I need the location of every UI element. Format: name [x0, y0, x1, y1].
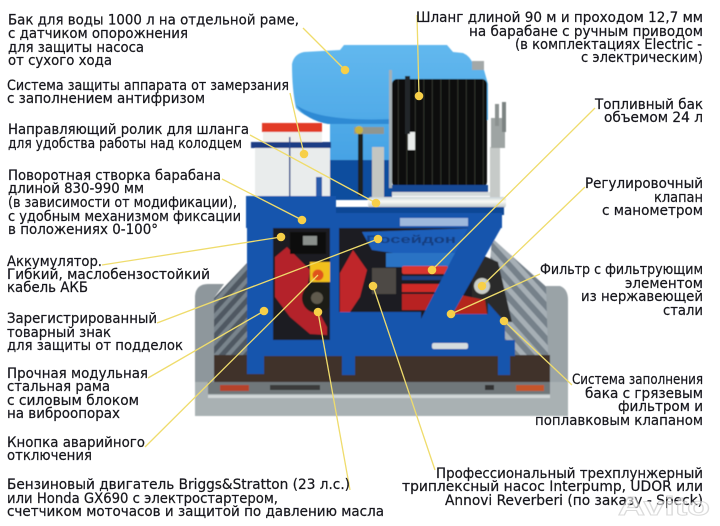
label: filter: стали — [663, 303, 703, 319]
label: water tank — [8, 12, 299, 69]
label: filling system: поплавковым клапаном — [535, 413, 703, 429]
label: regulating valve: клапан — [654, 190, 703, 206]
label: guide roller — [8, 122, 249, 152]
label: hose: с электрическим) — [581, 50, 703, 66]
label: filter: из нержавеющей — [581, 289, 703, 305]
label: trademark: товарный знак — [7, 325, 111, 341]
label: antifreeze system: Система защиты аппарата от замерзания — [7, 78, 289, 94]
label: hose: Шланг длиной 90 м и проходом 12,7 мм — [416, 10, 703, 26]
label: drum door: (в зависимости от модификации), — [8, 195, 237, 211]
label: steel frame: на виброопорах — [7, 406, 120, 422]
label: filling system: фильтром и — [618, 399, 703, 415]
label: trademark: для защиты от подделок — [7, 338, 183, 354]
frame label plates — [400, 218, 468, 226]
engine covers — [275, 232, 367, 335]
label: regulating valve — [585, 176, 703, 219]
label: filter — [540, 262, 703, 319]
label: guide roller: Направляющий ролик для шланга — [8, 122, 249, 138]
frame latch — [432, 343, 468, 349]
leader lines — [102, 15, 595, 490]
label: hose: на барабане с ручным приводом — [469, 24, 703, 40]
label: fuel tank: объемом 24 л — [604, 110, 703, 126]
label: fuel tank — [594, 97, 703, 126]
label: fuel tank: Топливный бак — [594, 97, 703, 113]
label: regulating valve: с манометром — [602, 203, 703, 219]
blue frame — [246, 213, 515, 375]
cap — [472, 61, 484, 70]
label: drum door — [8, 168, 241, 238]
inner dark bay — [272, 228, 472, 342]
left labels — [7, 12, 384, 520]
water tank — [292, 45, 488, 165]
label: battery: Гибкий, маслобензостойкий — [7, 267, 210, 283]
label: pump: триплексный насос Interpump, UDOR или — [402, 479, 703, 495]
label: engine — [7, 477, 384, 520]
label: drum door: с удобным механизмом фиксации — [8, 209, 241, 225]
label: pump: Annovi Reverberi (по заказу - Speck) — [445, 493, 703, 509]
valve and reel supports — [354, 102, 506, 197]
label: filter: элементом — [625, 276, 703, 292]
label: drum door: длиной 830-990 мм — [8, 181, 144, 197]
label: steel frame: с силовым блоком — [7, 393, 139, 409]
pump red parts — [372, 266, 490, 314]
blue cylinder — [386, 253, 462, 267]
label: battery: кабель АКБ — [7, 280, 88, 296]
label: steel frame: Прочная модульная — [7, 366, 148, 382]
watermark: Avito — [618, 491, 710, 521]
label: filling system — [535, 372, 703, 429]
right labels — [402, 10, 703, 509]
under-roller beam — [336, 207, 504, 215]
pulley hub — [311, 292, 323, 304]
label: pump: Профессиональный трехплунжерный — [436, 466, 703, 482]
label: antifreeze system: с заполнением антифризом — [7, 91, 205, 107]
blue panel under reel — [330, 160, 392, 200]
illustration: jetting machine on trailer — [195, 45, 568, 416]
label: trademark — [7, 311, 183, 354]
label: battery: Аккумулятор. — [7, 254, 102, 270]
label: water tank: для защиты насоса — [8, 40, 144, 56]
label: hose: (в комплектациях Electric - — [515, 37, 702, 53]
label: guide roller: для удобства работы над колодцем — [8, 136, 242, 152]
label: regulating valve: Регулировочный — [585, 176, 703, 192]
label: drum door: Поворотная створка барабана — [8, 168, 221, 184]
label: engine: Бензиновый двигатель Briggs&Stratton (23 л.с.) — [7, 477, 350, 493]
marker dots — [260, 66, 508, 325]
label: filter: Фильтр с фильтрующим — [540, 262, 703, 278]
upper pump panel — [362, 228, 478, 262]
label: water tank: с датчиком опорожнения — [8, 26, 188, 42]
red stop button — [312, 270, 324, 280]
label: drum door: в положениях 0-100° — [8, 222, 158, 238]
brand text: Посейдон — [366, 234, 456, 246]
hose reel — [389, 70, 490, 196]
label: engine: или Honda GX690 с электростартером, — [7, 491, 278, 507]
trailer — [195, 238, 568, 416]
canister — [251, 123, 331, 197]
plate under canister — [246, 196, 336, 214]
label: emergency stop — [7, 435, 145, 464]
label: engine: счетчиком моточасов и защитой по давлению масла — [7, 504, 384, 520]
label: hose — [416, 10, 703, 66]
emergency stop box — [310, 262, 330, 282]
label: steel frame: стальная рама — [7, 379, 110, 395]
label: battery — [7, 254, 210, 296]
label: pump — [402, 466, 703, 509]
label: emergency stop: Кнопка аварийного — [7, 435, 145, 451]
label: filling system: бака с грязевым — [585, 386, 703, 402]
guide roller — [368, 197, 506, 208]
label: steel frame — [7, 366, 148, 422]
label: water tank: Бак для воды 1000 л на отдельной раме, — [8, 12, 299, 28]
label: water tank: от сухого хода — [8, 53, 112, 69]
label: emergency stop: отключения — [7, 448, 92, 464]
label: trademark: Зарегистрированный — [7, 311, 157, 327]
engine pulley — [302, 283, 332, 313]
tank shade — [296, 105, 392, 124]
label: antifreeze system — [7, 78, 289, 107]
dark area behind gauge — [440, 250, 512, 322]
